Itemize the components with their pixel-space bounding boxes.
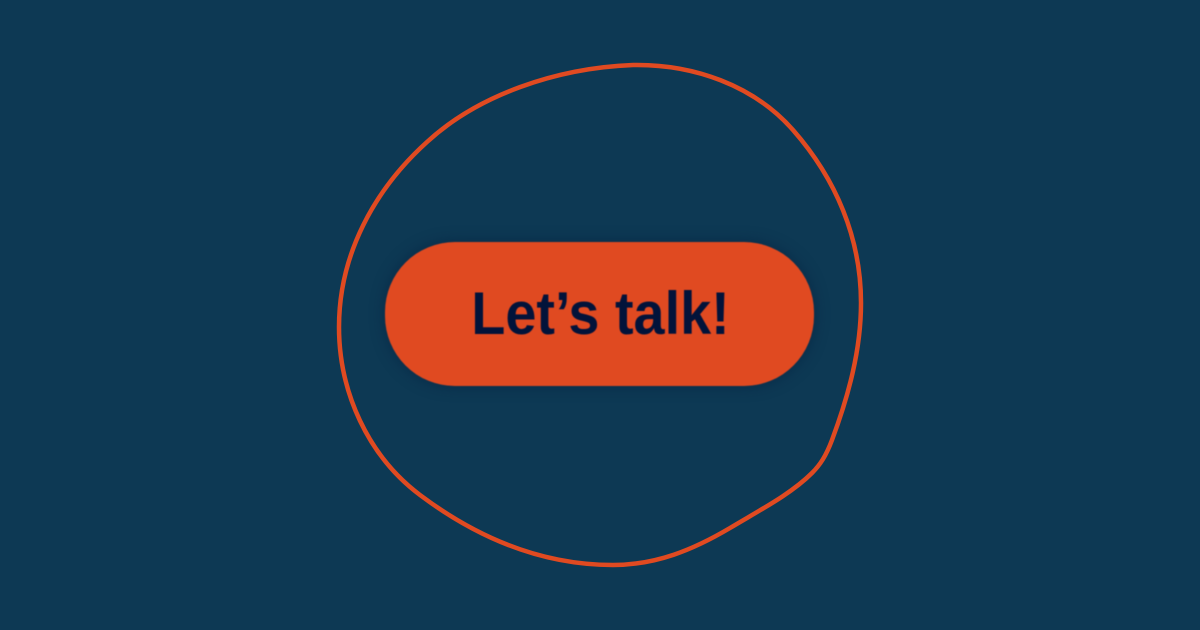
call-to-action button — [385, 242, 814, 386]
button label: Let’s talk! — [471, 280, 730, 347]
